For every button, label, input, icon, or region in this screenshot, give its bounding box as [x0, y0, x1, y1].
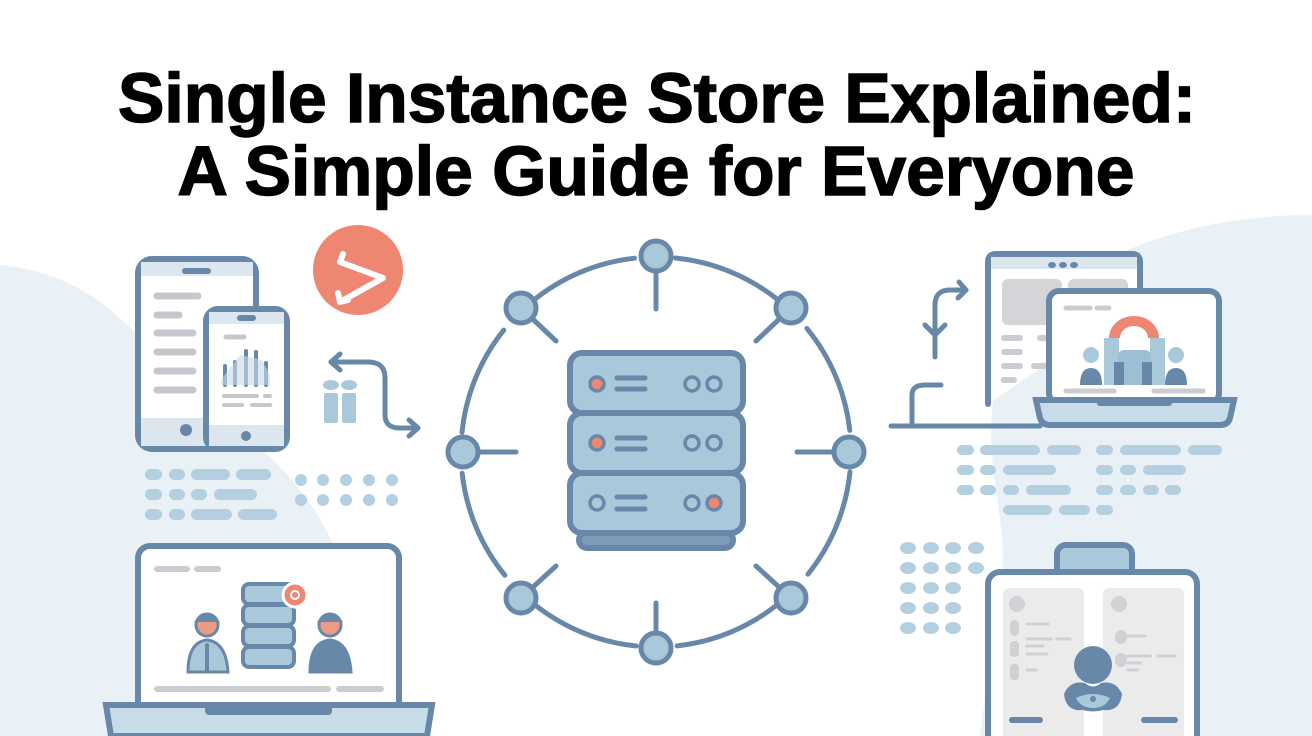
title: [118, 59, 1196, 210]
icon: phone with chart: [206, 309, 287, 449]
diagram: central server network: [448, 241, 864, 663]
arrows: right side connectors: [891, 282, 1040, 426]
title: A Simple Guide for Everyone: [178, 132, 1134, 210]
people: [188, 614, 351, 672]
server mini: [243, 584, 294, 667]
text placeholder dots right: [900, 445, 1222, 634]
monitor: back: [988, 254, 1140, 404]
arrow: curved connector: [331, 354, 418, 436]
nodes: [448, 241, 864, 663]
title: Single Instance Store Explained:: [118, 59, 1196, 137]
icon: salmon share circle: [313, 225, 403, 315]
icon: user: [1064, 646, 1122, 712]
background blob left: [0, 265, 350, 736]
icon: small figures: [323, 380, 357, 423]
clipboard: bottom right: [988, 545, 1197, 736]
laptop: bottom left: [106, 546, 432, 736]
laptop: right: [1036, 291, 1234, 425]
icon: tablet: [138, 259, 256, 449]
text placeholder dots left: [145, 469, 398, 520]
ring arcs: [461, 257, 851, 647]
background blob right: [980, 215, 1312, 736]
server stack: [570, 353, 743, 548]
